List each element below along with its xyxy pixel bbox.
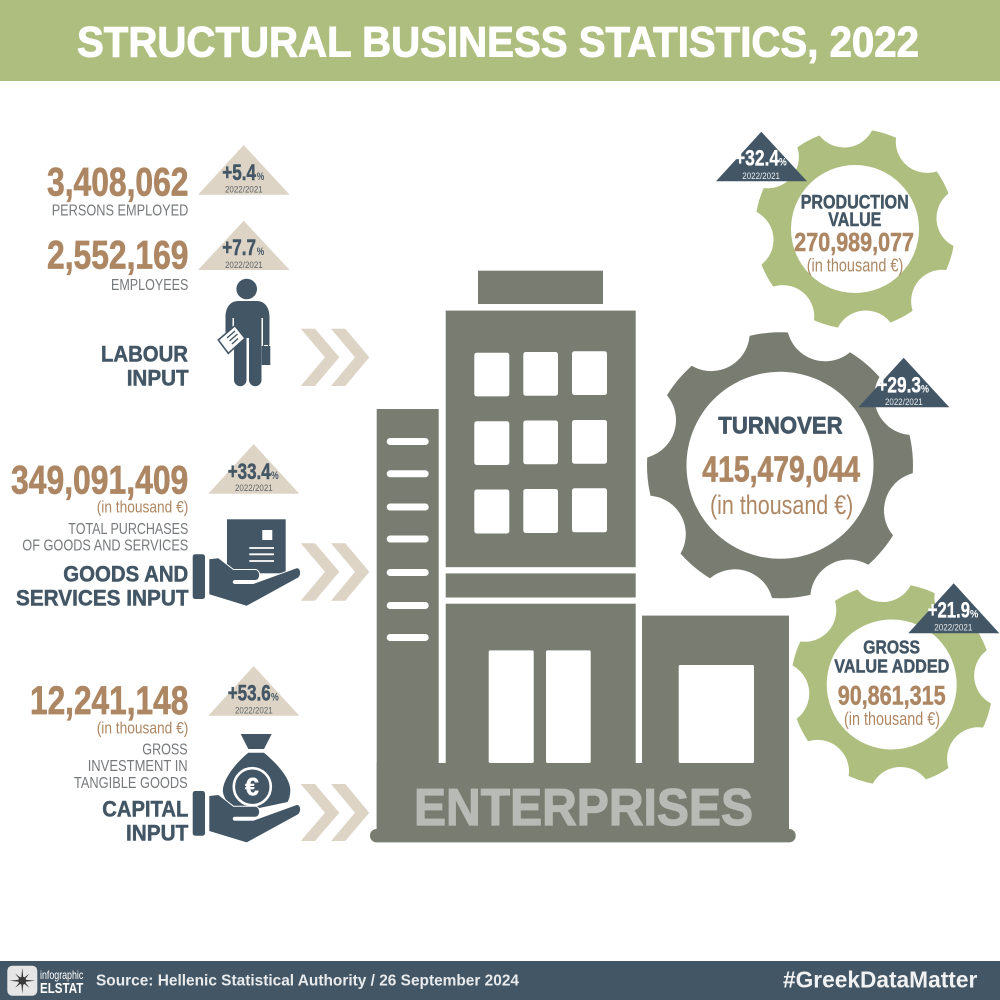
heading: capital input: CAPITAL xyxy=(102,797,188,822)
gear: gross value added: GROSS xyxy=(863,637,920,657)
heading: labour input xyxy=(101,342,189,391)
badge: value added change: 2022/2021 xyxy=(934,622,972,633)
gear: production value xyxy=(755,129,955,329)
badge: purchases change: % xyxy=(271,470,279,482)
label: enterprises: ENTERPRISES xyxy=(414,779,753,837)
panel: persons employed xyxy=(47,161,188,220)
badge: value added change: +21.9 xyxy=(928,598,970,623)
badge: turnover change: +29.3 xyxy=(877,372,921,397)
badge: production change: 2022/2021 xyxy=(742,171,780,182)
gear: production value: (in thousand €) xyxy=(807,256,903,276)
heading: capital input: INPUT xyxy=(126,821,189,846)
badge: turnover change: 2022/2021 xyxy=(885,397,923,408)
logo text xyxy=(40,968,83,997)
panel: total purchases: TOTAL PURCHASES xyxy=(68,521,188,538)
gear: production value: PRODUCTION xyxy=(801,191,909,213)
header banner xyxy=(0,0,1000,81)
icon: hand holding money bag: € xyxy=(245,774,259,802)
icon: ELSTAT logo xyxy=(7,966,37,996)
gear: gross value added: 90,861,315 xyxy=(838,680,946,710)
panel: employees: 2,552,169 xyxy=(47,233,188,277)
panel: gross investment: (in thousand €) xyxy=(97,718,188,737)
heading: labour input: INPUT xyxy=(127,366,189,391)
heading: goods and services input xyxy=(16,562,189,611)
badge: production change: % xyxy=(779,157,787,169)
building: enterprises xyxy=(370,271,796,842)
gear: turnover xyxy=(647,332,913,598)
gear: production value: VALUE xyxy=(828,209,881,231)
gear: turnover: 415,479,044 xyxy=(702,449,860,490)
panel: total purchases: 349,091,409 xyxy=(11,458,188,502)
badge: persons employed change: % xyxy=(257,171,264,183)
badge: purchases change: 2022/2021 xyxy=(235,483,273,494)
panel: persons employed: PERSONS EMPLOYED xyxy=(52,203,188,220)
badge: persons employed change xyxy=(198,145,290,196)
source: Source: Hellenic Statistical Authority / 26 September 2024 xyxy=(96,972,519,990)
badge: value added change: % xyxy=(970,609,978,621)
panel: employees: EMPLOYEES xyxy=(111,277,188,294)
badge: production change: +32.4 xyxy=(735,146,780,171)
badge: production change xyxy=(716,132,807,182)
logo text: infographic xyxy=(40,968,83,982)
arrow: labour chevrons xyxy=(301,329,369,386)
icon: person with clipboard and briefcase xyxy=(218,279,270,386)
badge: persons employed change: +5.4 xyxy=(222,160,257,185)
badge: purchases change xyxy=(208,444,299,494)
badge: investment change: +53.6 xyxy=(228,680,271,705)
badge: turnover change xyxy=(858,358,949,408)
gear: turnover: TURNOVER xyxy=(718,412,843,439)
panel: persons employed: 3,408,062 xyxy=(47,161,188,205)
badge: employees change: % xyxy=(257,246,264,258)
title: STRUCTURAL BUSINESS STATISTICS, 2022 xyxy=(77,19,919,67)
heading: goods and services input: GOODS AND xyxy=(63,562,188,587)
panel: gross investment: GROSS xyxy=(142,741,188,758)
badge: turnover change: % xyxy=(921,383,929,395)
badge: persons employed change: 2022/2021 xyxy=(225,185,263,196)
heading: capital input xyxy=(102,797,189,846)
gear: gross value added xyxy=(791,584,993,786)
badge: employees change xyxy=(198,221,290,271)
panel: total purchases: (in thousand €) xyxy=(97,498,188,517)
gear: production value: 270,989,077 xyxy=(794,227,914,257)
panel: total purchases: OF GOODS AND SERVICES xyxy=(22,538,188,555)
gear: turnover: (in thousand €) xyxy=(710,490,853,520)
badge: employees change: +7.7 xyxy=(222,235,256,260)
panel: gross investment xyxy=(30,679,188,792)
panel: total purchases xyxy=(11,458,188,555)
logo text: ELSTAT xyxy=(40,981,83,997)
badge: value added change xyxy=(908,583,999,633)
heading: goods and services input: SERVICES INPUT xyxy=(16,586,189,611)
hashtag: #GreekDataMatter xyxy=(783,966,977,992)
arrow: capital chevrons xyxy=(301,784,369,841)
heading: labour input: LABOUR xyxy=(101,342,188,367)
panel: gross investment: INVESTMENT IN xyxy=(88,758,188,775)
icon: hand holding document xyxy=(193,519,300,606)
gear: gross value added: VALUE ADDED xyxy=(834,657,949,677)
badge: investment change: % xyxy=(271,691,279,703)
footer bar xyxy=(0,961,1000,1000)
badge: investment change xyxy=(208,666,299,716)
icon: hand holding money bag xyxy=(193,734,300,842)
arrow: goods chevrons xyxy=(301,543,369,601)
panel: gross investment: 12,241,148 xyxy=(30,679,188,723)
panel: gross investment: TANGIBLE GOODS xyxy=(74,775,188,792)
gear: gross value added: (in thousand €) xyxy=(844,709,940,729)
badge: investment change: 2022/2021 xyxy=(235,705,273,716)
panel: employees xyxy=(47,233,188,294)
badge: employees change: 2022/2021 xyxy=(225,260,263,271)
badge: purchases change: +33.4 xyxy=(228,459,271,484)
